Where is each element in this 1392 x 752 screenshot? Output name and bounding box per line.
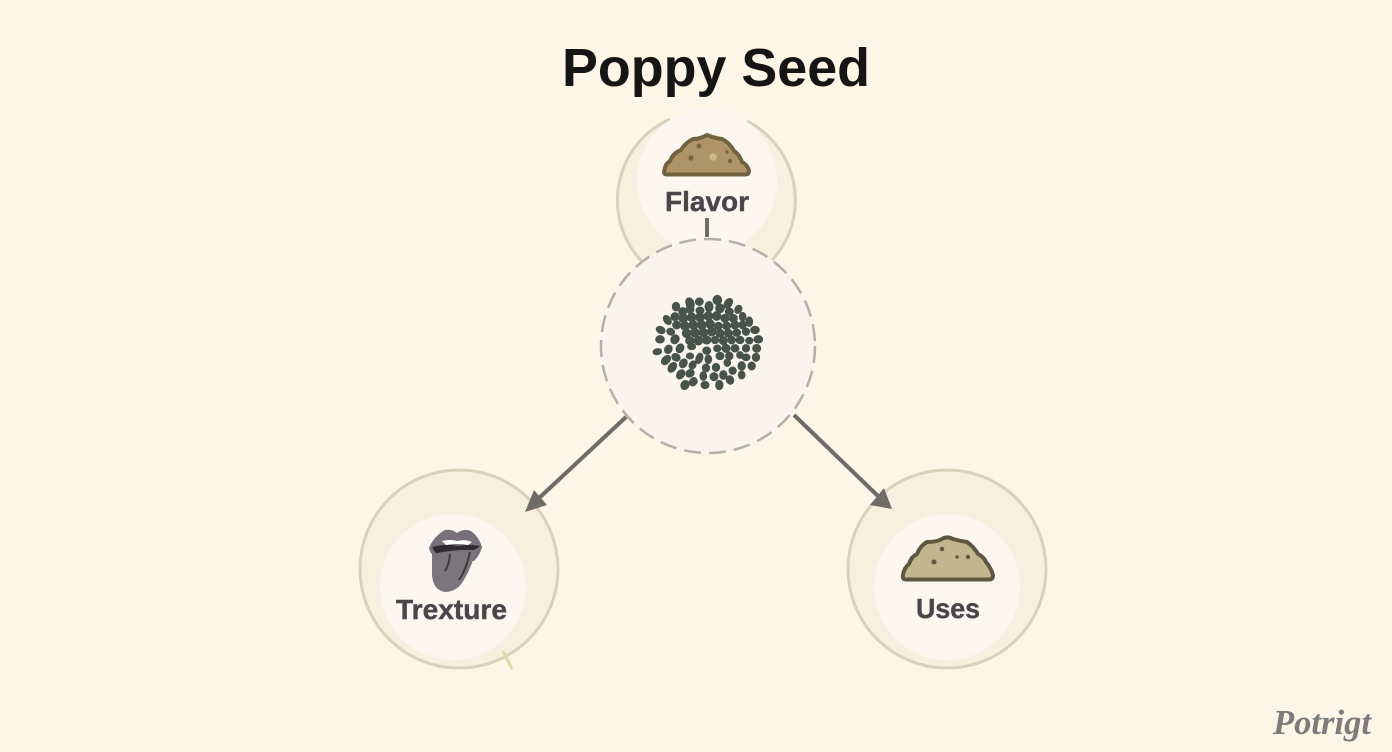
- label: uses: Uses: [916, 593, 980, 624]
- connector: center to flavor: [705, 218, 709, 237]
- label: texture: Trexture: [396, 594, 507, 625]
- icon: poppy seed cluster: [653, 296, 762, 391]
- node: uses: [848, 470, 1046, 668]
- title: Poppy Seed: [562, 38, 870, 98]
- node: flavor: [617, 109, 795, 289]
- watermark: Potrigt: [1272, 703, 1372, 742]
- arrow: center to texture: [525, 417, 626, 512]
- label: flavor: Flavor: [665, 186, 749, 217]
- node: texture: [360, 470, 558, 669]
- icon: uses seed mound: [903, 537, 993, 580]
- icon: flavor seed mound: [664, 135, 749, 174]
- node: center poppy seeds: [601, 239, 815, 453]
- arrow: center to uses: [794, 415, 892, 509]
- icon: tongue and lips: [429, 530, 482, 592]
